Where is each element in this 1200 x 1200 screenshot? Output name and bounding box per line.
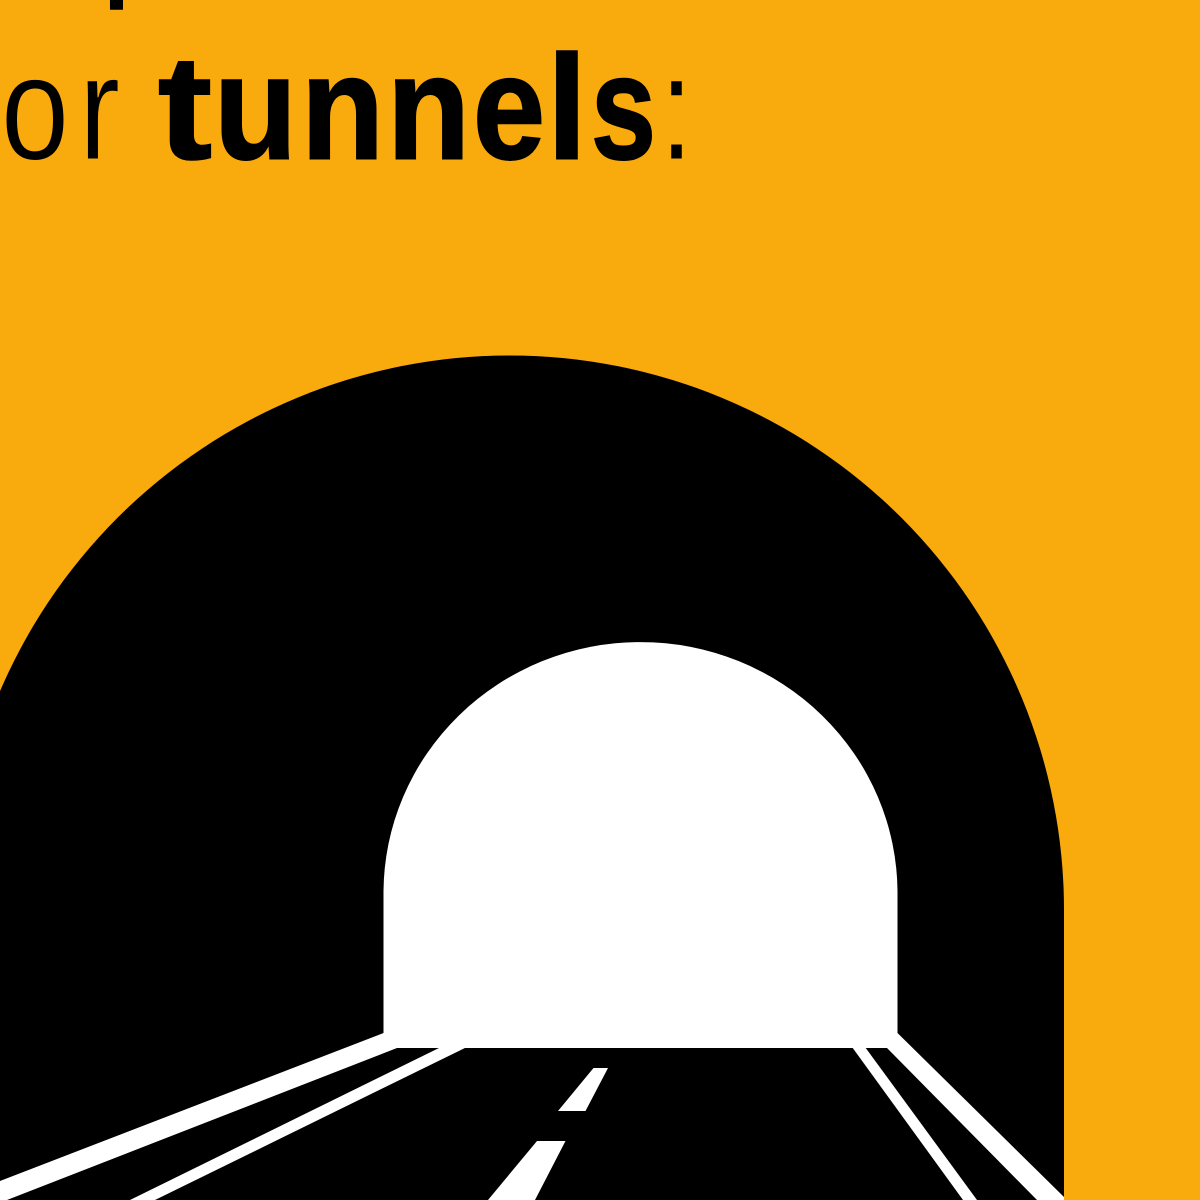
heading: or tunnels:: o bbox=[1, 26, 69, 191]
road edge line right bbox=[887, 1033, 1064, 1200]
heading: or tunnels:: n bbox=[301, 26, 384, 190]
road lane line left bbox=[130, 1047, 467, 1200]
heading: or tunnels:: u bbox=[214, 26, 297, 190]
road centre dash near bbox=[488, 1141, 566, 1200]
heading: or tunnels:: t bbox=[158, 26, 212, 190]
heading: or tunnels: bbox=[1, 26, 693, 191]
road centre dash far bbox=[558, 1068, 608, 1111]
tunnel arch bbox=[0, 356, 1064, 1200]
heading: or tunnels:: r bbox=[79, 26, 120, 191]
heading: or tunnels:: s bbox=[591, 26, 656, 190]
heading: or tunnels:: l bbox=[547, 26, 587, 190]
icon: road tunnel bbox=[0, 356, 1064, 1200]
road lane line right bbox=[852, 1047, 977, 1200]
road edge line left bbox=[0, 1033, 397, 1200]
heading: or tunnels:: e bbox=[473, 26, 545, 190]
tunnel opening bbox=[384, 642, 898, 1048]
heading: or tunnels:: : bbox=[660, 26, 693, 191]
heading: or tunnels:: n bbox=[387, 26, 470, 190]
